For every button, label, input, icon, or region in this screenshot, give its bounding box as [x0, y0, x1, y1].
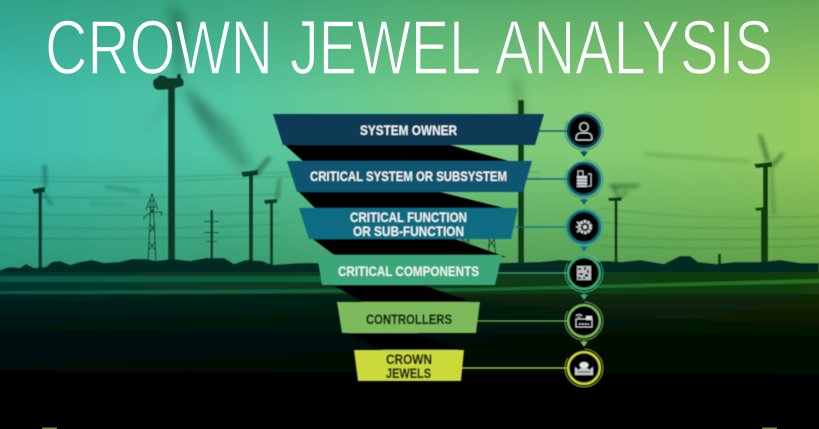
step: system owner — [273, 114, 544, 145]
step: critical components — [317, 255, 502, 285]
turbine silhouettes — [32, 74, 772, 272]
icon: person — [565, 112, 603, 150]
step: critical function or sub-function: CRITICAL FUNCTION — [350, 210, 467, 225]
step: controllers — [337, 302, 480, 333]
step: crown jewels — [354, 350, 464, 381]
step: crown jewels: CROWN — [386, 352, 432, 367]
ground — [0, 272, 819, 429]
funnel diagram — [273, 112, 603, 387]
title — [48, 20, 770, 74]
step: critical system or subsystem — [287, 161, 532, 192]
step: critical system or subsystem: CRITICAL SYSTEM OR SUBSYSTEM — [310, 169, 507, 184]
flow arrows between icons — [581, 150, 587, 346]
step: crown jewels: JEWELS — [386, 366, 431, 381]
connector lines — [461, 131, 568, 368]
funnel black shadows — [285, 145, 516, 352]
pylons — [144, 194, 496, 262]
icon: components chip — [565, 254, 603, 292]
turbine blades motion blur — [42, 5, 784, 215]
step: critical function or sub-function: OR SUB-FUNCTION — [353, 224, 464, 239]
step: controllers: CONTROLLERS — [366, 312, 452, 327]
icon: controller — [565, 302, 603, 340]
step: system owner: SYSTEM OWNER — [360, 123, 457, 138]
step: critical function or sub-function — [299, 208, 518, 239]
bottom edge markers — [42, 428, 777, 429]
icon: function gear — [565, 208, 603, 246]
icon: crown jewels — [565, 349, 603, 387]
icon: system — [565, 160, 603, 198]
step: critical components: CRITICAL COMPONENTS — [338, 264, 479, 279]
title: JEWEL — [290, 5, 481, 91]
title: CROWN — [45, 5, 273, 91]
tree line — [0, 256, 819, 300]
